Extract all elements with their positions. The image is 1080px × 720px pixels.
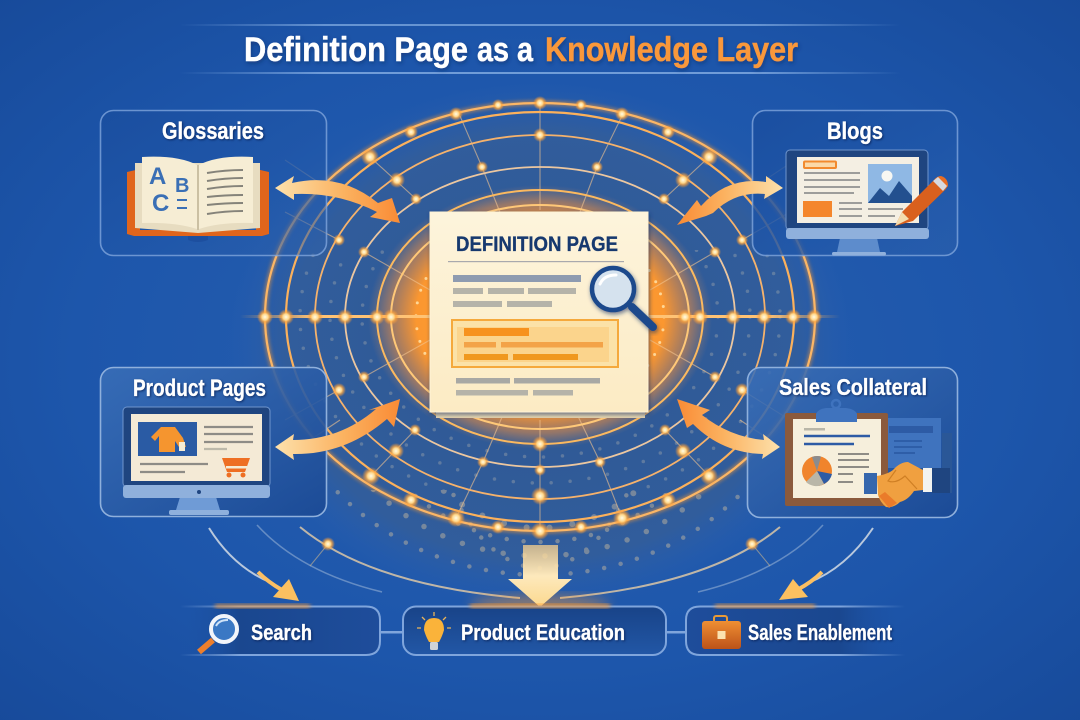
double arrow: Glossaries to definition page — [275, 176, 400, 223]
arrow: right output to Sales Enablement — [779, 528, 873, 600]
title: as a — [477, 31, 534, 69]
double arrow: Blogs to definition page — [677, 176, 783, 225]
icon: monitor with product page — [123, 407, 270, 515]
panel: Glossaries — [100, 110, 326, 256]
text lines: footer — [456, 378, 600, 396]
arrow: down to Product Education — [470, 545, 610, 612]
icon: magnifying glass — [592, 268, 653, 327]
double arrow: Product Pages to definition page — [275, 399, 400, 460]
panel: Sales Collateral — [748, 368, 958, 518]
title: Knowledge Layer — [545, 31, 798, 69]
lower curved connector arcs — [257, 525, 823, 598]
output box: Product Education — [403, 604, 666, 655]
heading: Product Pages: Product Pages — [133, 375, 266, 402]
highlighted definition block — [452, 320, 618, 367]
connector — [380, 631, 402, 634]
icon: open book: A — [149, 163, 166, 190]
arrow: left output to Search — [209, 528, 299, 601]
icon: open book: B — [175, 175, 189, 197]
icon: monitor with blog page and pencil — [786, 150, 948, 256]
title band — [180, 24, 900, 74]
connector — [666, 631, 686, 634]
double arrow: Sales Collateral to definition page — [677, 399, 780, 459]
heading: Sales Collateral: Sales Collateral — [779, 374, 927, 400]
output box: Search — [180, 604, 380, 655]
heading: Glossaries: Glossaries — [162, 118, 264, 145]
label: Search: Search — [251, 620, 312, 645]
panel: Blogs — [752, 110, 958, 256]
icon: light bulb — [417, 612, 451, 650]
panel: Product Pages — [100, 368, 326, 516]
output box: Sales Enablement — [686, 604, 905, 655]
text lines: intro — [453, 275, 581, 307]
icon: briefcase — [702, 616, 741, 649]
title: Definition Page — [244, 31, 468, 69]
heading: Blogs: Blogs — [827, 118, 883, 145]
label: Product Education: Product Education — [461, 620, 625, 645]
label: Sales Enablement: Sales Enablement — [748, 620, 893, 645]
icon: clipboard, report and handshake — [785, 400, 952, 508]
icon: open book: C — [152, 190, 169, 217]
central definition page card — [430, 212, 653, 418]
icon: open book — [127, 157, 269, 242]
heading: Definition Page: DEFINITION PAGE — [456, 233, 618, 256]
knowledge network rings — [242, 96, 838, 579]
icon: magnifier — [199, 616, 237, 652]
